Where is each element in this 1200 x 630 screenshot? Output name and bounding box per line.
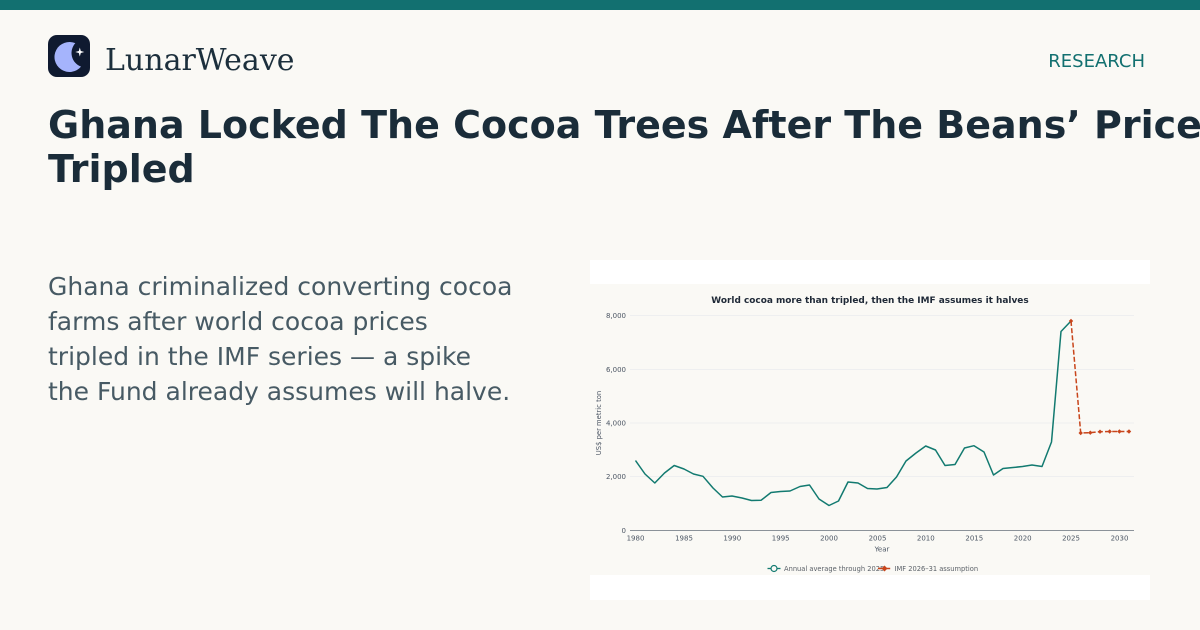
x axis labels: 1990 <box>723 534 741 542</box>
y axis labels <box>606 312 626 535</box>
annual average line <box>636 321 1071 506</box>
x axis labels: 2015 <box>965 534 983 542</box>
title <box>48 103 1200 191</box>
description text: Ghana criminalized converting cocoa <box>48 272 512 301</box>
x axis labels: 2005 <box>869 534 886 542</box>
x axis labels <box>627 534 1128 542</box>
legend: IMF assumption: IMF 2026–31 assumption <box>894 565 978 573</box>
x axis labels: 1985 <box>675 534 693 542</box>
y axis labels: 6,000 <box>606 366 626 374</box>
chart title: World cocoa more than tripled, then the IMF assumes it halves <box>711 296 1029 306</box>
y axis labels: 2,000 <box>606 473 626 481</box>
x axis labels: 2020 <box>1014 534 1032 542</box>
x axis labels: 1995 <box>772 534 790 542</box>
legend: annual average: Annual average through 2025 <box>784 565 884 573</box>
y axis labels: 8,000 <box>606 312 626 320</box>
y axis labels: 0 <box>622 527 626 535</box>
description text: farms after world cocoa prices <box>48 307 428 336</box>
x axis labels: 2010 <box>917 534 935 542</box>
research label: RESEARCH <box>1048 51 1145 72</box>
x axis title: Year <box>874 546 890 554</box>
gridlines <box>630 316 1134 476</box>
description text: tripled in the IMF series — a spike <box>48 342 471 371</box>
description text <box>48 272 512 406</box>
icon: moon logo <box>48 35 90 77</box>
brand name: LunarWeave <box>105 43 295 78</box>
x axis line <box>630 530 1134 532</box>
x axis labels: 1980 <box>627 534 644 542</box>
top accent bar <box>0 0 1200 10</box>
panel: chart card <box>590 260 1150 600</box>
x axis labels: 2030 <box>1111 534 1128 542</box>
y axis labels: 4,000 <box>606 420 626 428</box>
description text: the Fund already assumes will halve. <box>48 377 510 406</box>
x axis labels: 2025 <box>1062 534 1080 542</box>
IMF assumption line <box>1069 319 1131 435</box>
y axis title: US$ per metric ton <box>595 391 603 455</box>
line chart <box>590 284 1150 575</box>
x axis labels: 2000 <box>820 534 838 542</box>
title: Ghana Locked The Cocoa Trees After The Beans’ Price <box>48 103 1200 147</box>
title: Tripled <box>48 147 195 191</box>
